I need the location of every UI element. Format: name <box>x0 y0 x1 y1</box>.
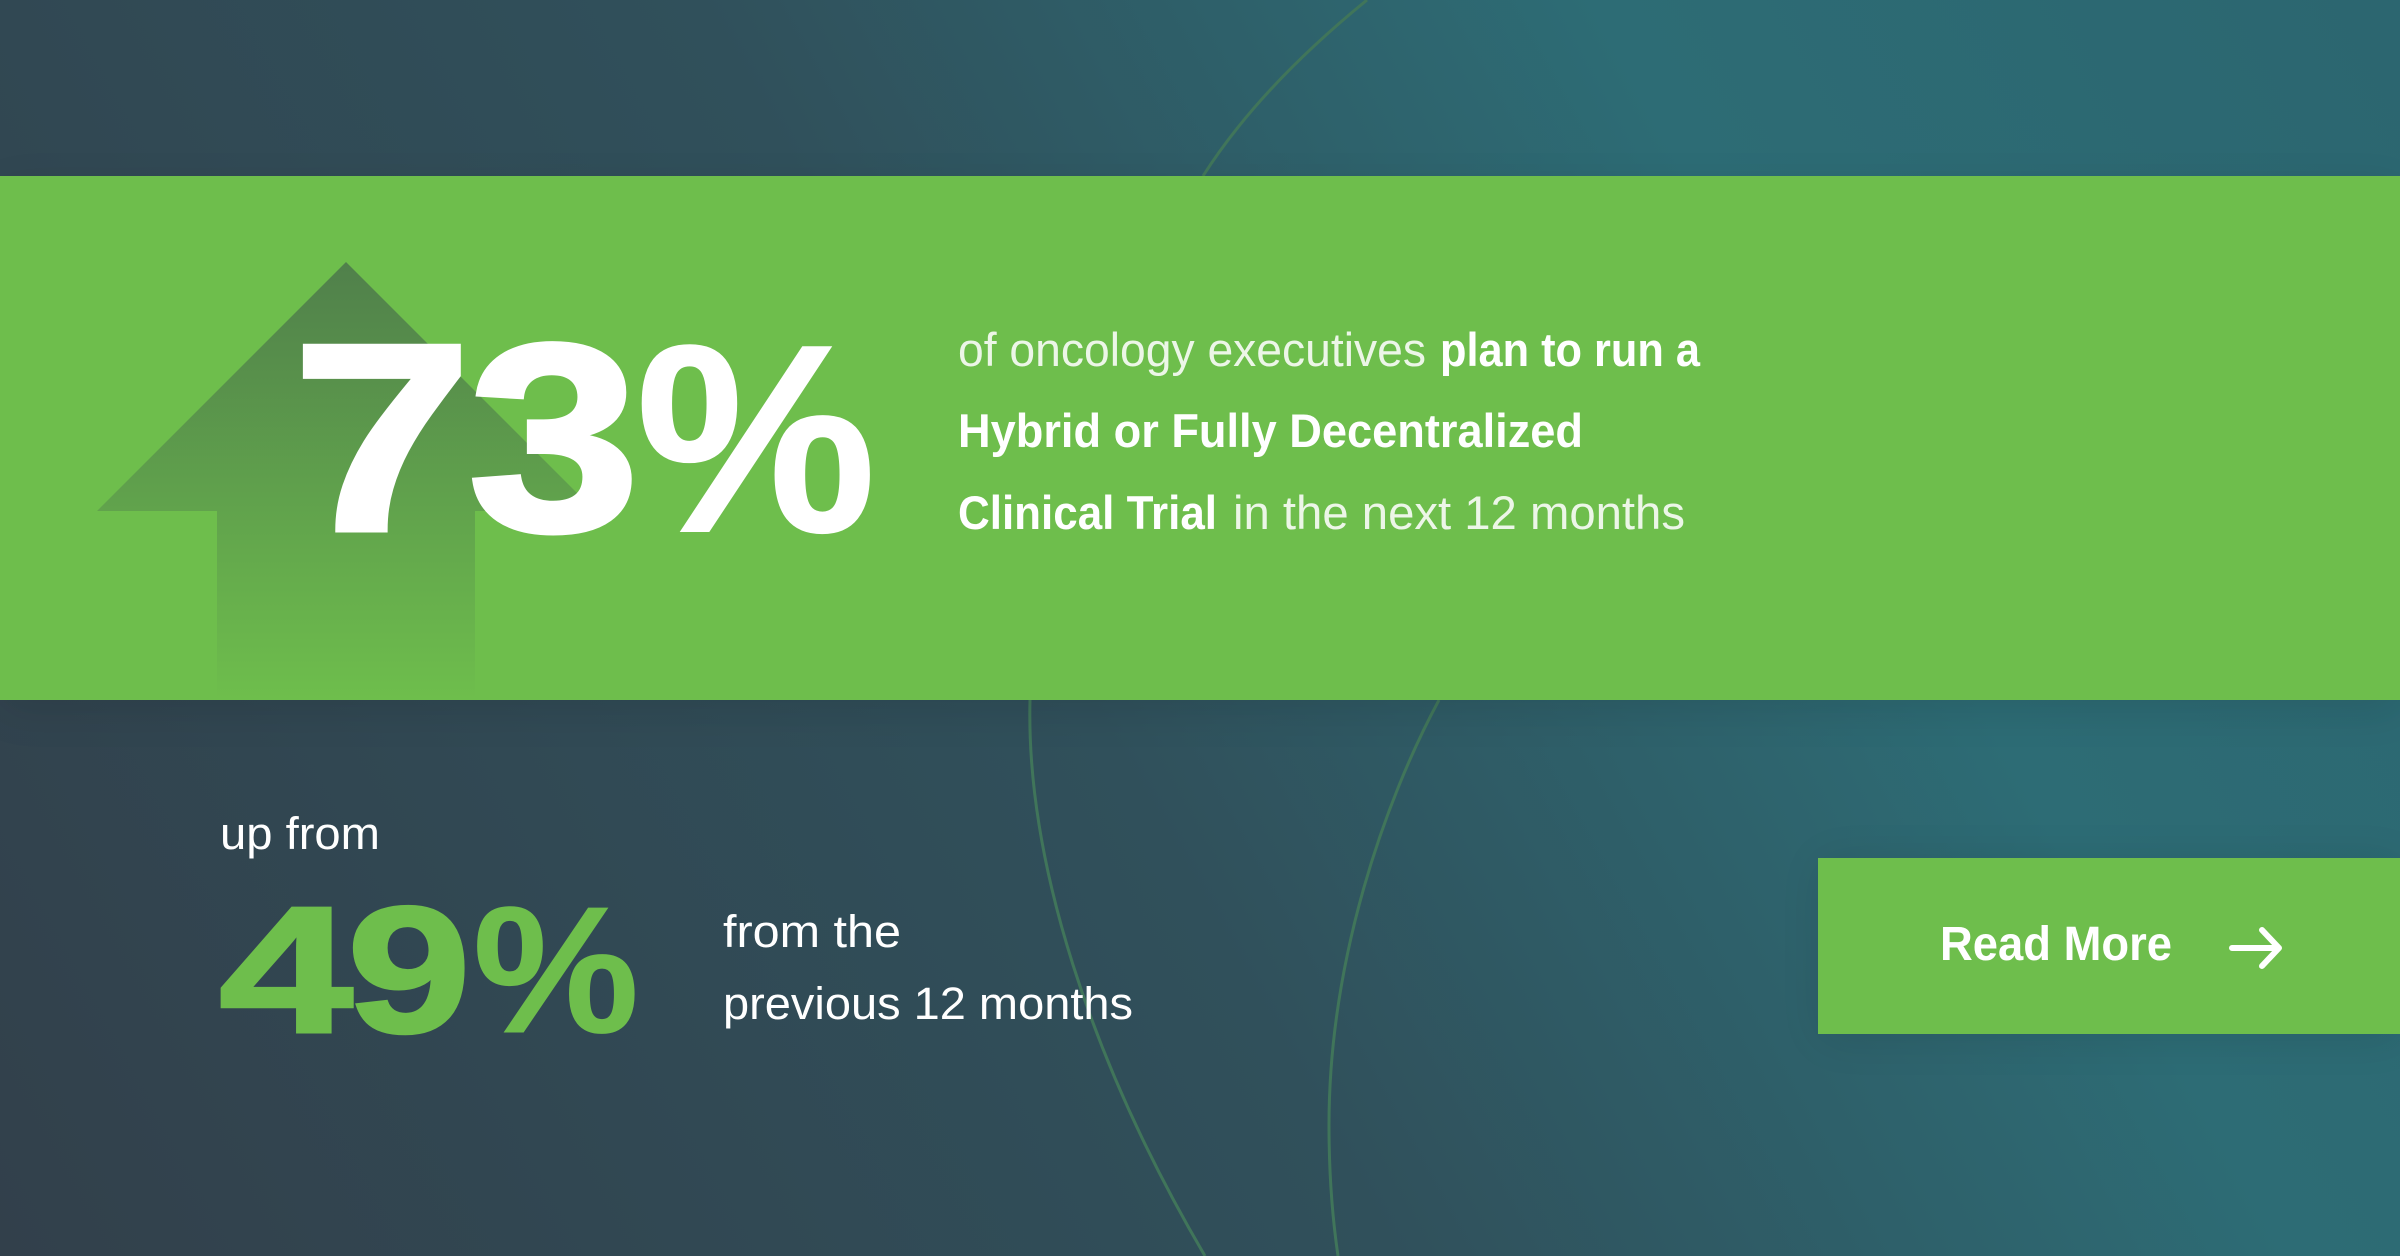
from the previous 12 months text: from the <box>723 906 901 957</box>
icon: arrow <box>2232 930 2279 966</box>
big stat 73%: 7 <box>292 288 472 587</box>
background arcs <box>1030 0 1439 1256</box>
big stat 49%: 4 <box>219 870 353 1071</box>
description text: of oncology executives <box>958 323 1426 376</box>
big stat 49% <box>219 870 639 1071</box>
description text: plan to run a <box>1440 323 1701 376</box>
up from label: up from <box>220 808 380 859</box>
button shadow <box>1822 862 2400 1038</box>
from the previous 12 months text <box>723 906 1133 1029</box>
from the previous 12 months text: previous 12 months <box>723 978 1133 1029</box>
big stat 49%: % <box>473 870 639 1071</box>
description text: Clinical Trial <box>958 486 1217 539</box>
big stat 73%: % <box>636 289 876 588</box>
button: read more <box>1818 858 2400 1034</box>
band shadow <box>0 190 2400 710</box>
description text: in the next 12 months <box>1233 486 1685 539</box>
big stat 49%: 9 <box>347 870 471 1071</box>
big stat 73%: 3 <box>468 288 640 587</box>
description text: Hybrid or Fully Decentralized <box>958 404 1583 457</box>
big stat 73% <box>292 288 876 588</box>
description text <box>958 323 1701 539</box>
button: read more: Read More <box>1940 918 2172 971</box>
icon: up arrow <box>97 262 595 700</box>
panel: green band <box>0 176 2400 700</box>
